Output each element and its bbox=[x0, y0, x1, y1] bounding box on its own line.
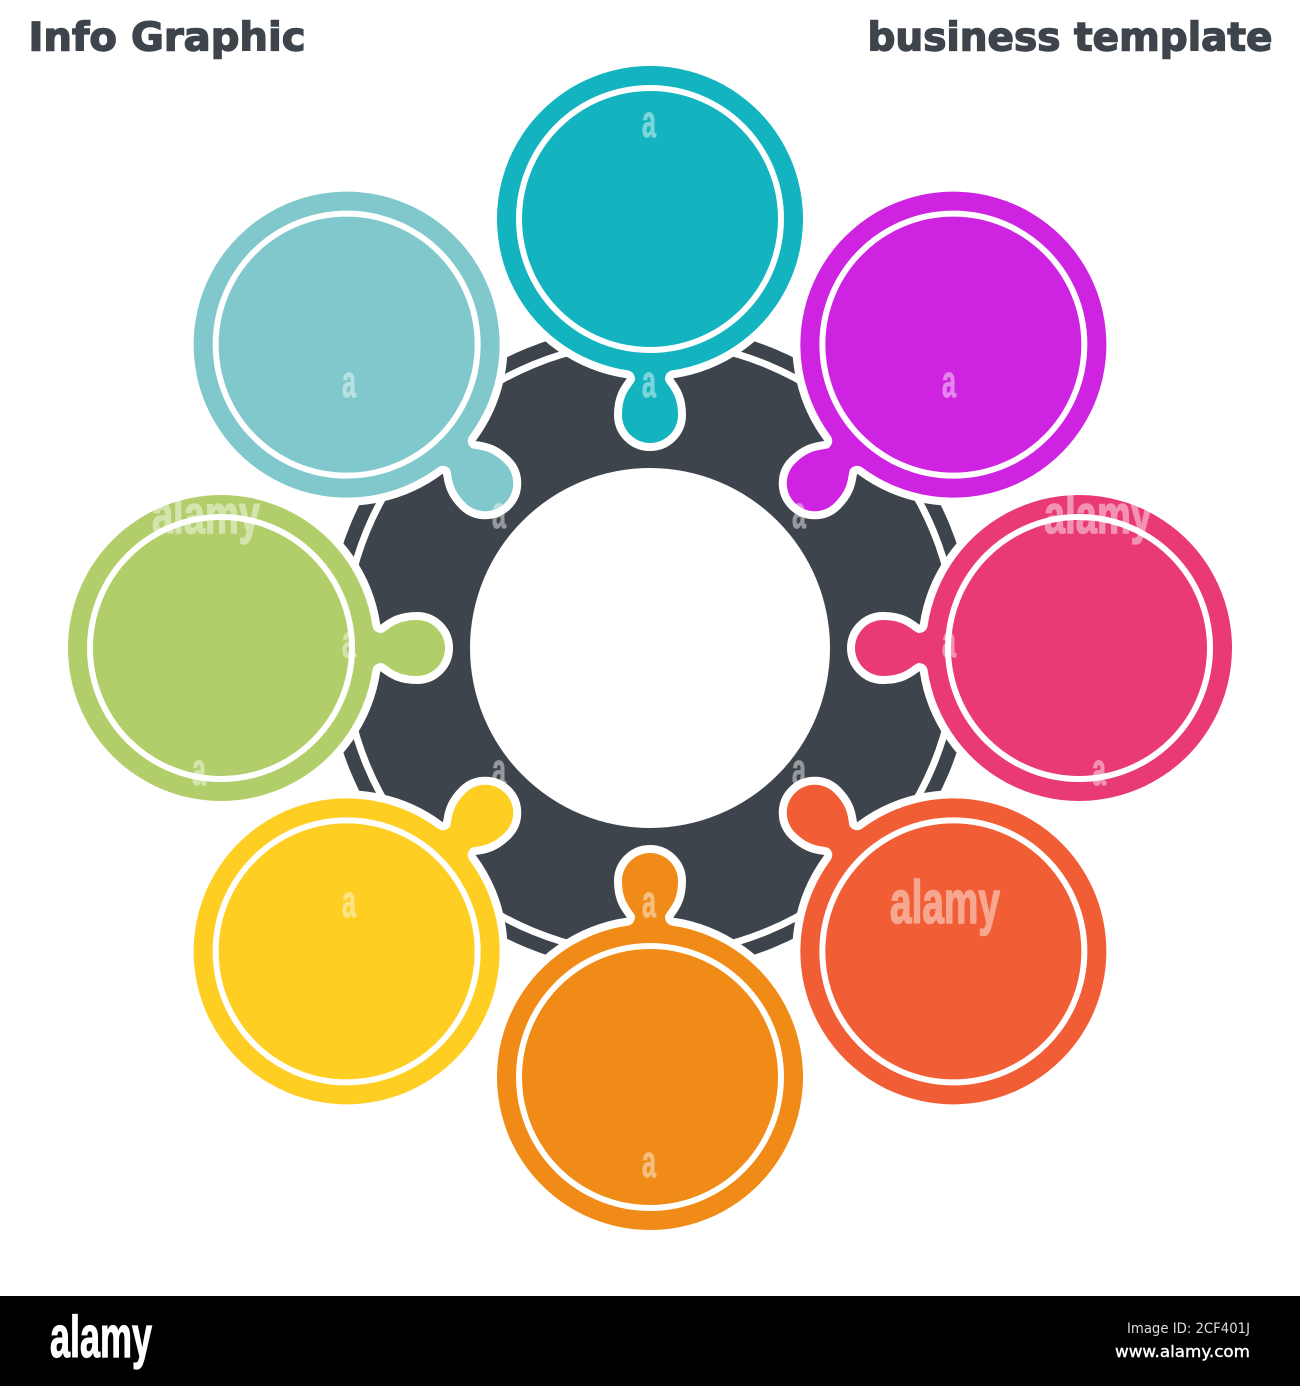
puzzle circle: red-orange (lower right) bbox=[687, 685, 1170, 1168]
central gear ring bbox=[326, 324, 974, 972]
watermarks: a bbox=[1092, 744, 1107, 795]
image id: Image ID: 2CF401J bbox=[1127, 1321, 1250, 1337]
puzzle circle: teal (top) bbox=[497, 66, 803, 443]
puzzle circle: pink (right) bbox=[855, 495, 1232, 801]
watermarks: a bbox=[942, 356, 957, 407]
puzzle circle: light teal (upper left) bbox=[130, 128, 613, 611]
watermarks: a bbox=[942, 616, 957, 667]
watermarks: a bbox=[192, 744, 207, 795]
watermarks: a bbox=[342, 876, 357, 927]
website: www.alamy.com bbox=[1115, 1342, 1250, 1361]
title: Info Graphic: Info Graphic bbox=[28, 14, 306, 60]
watermarks: alamy bbox=[890, 869, 1000, 936]
watermarks: alamy bbox=[152, 485, 260, 545]
watermarks: a bbox=[792, 487, 807, 538]
watermarks: a bbox=[792, 744, 807, 795]
watermarks bbox=[152, 96, 1152, 1187]
watermarks: a bbox=[642, 876, 657, 927]
puzzle circle: yellow (lower left) bbox=[130, 685, 613, 1168]
puzzle circle: green (left) bbox=[68, 495, 445, 801]
watermarks: a bbox=[342, 616, 357, 667]
watermarks: alamy bbox=[1044, 485, 1152, 545]
heading: business template: business template bbox=[868, 14, 1272, 60]
puzzle circle: orange (bottom) bbox=[497, 853, 803, 1230]
footer bar bbox=[0, 1296, 1300, 1386]
footer logo: alamy bbox=[50, 1305, 152, 1370]
watermarks: a bbox=[342, 356, 357, 407]
watermarks: a bbox=[642, 1136, 657, 1187]
watermarks: a bbox=[492, 487, 507, 538]
watermarks: a bbox=[642, 96, 657, 147]
watermarks: a bbox=[492, 744, 507, 795]
puzzle circle: magenta (upper right) bbox=[687, 128, 1170, 611]
watermarks: a bbox=[642, 356, 657, 407]
